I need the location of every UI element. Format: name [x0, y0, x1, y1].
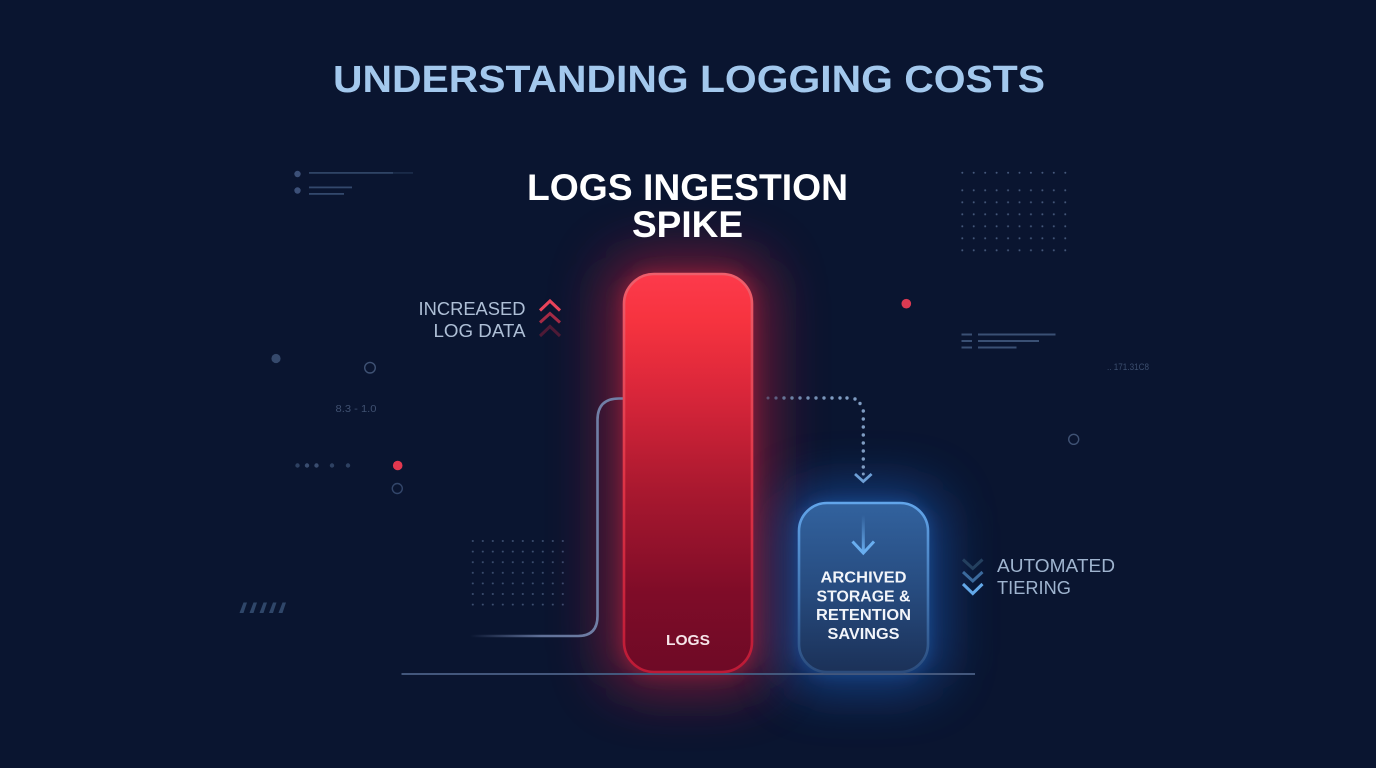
decoration: bottom-left dot grid — [468, 536, 568, 610]
small label: left: 8.3 - 1.0 — [336, 403, 377, 415]
baseline — [402, 673, 975, 675]
callout: automated tiering: TIERING — [997, 577, 1071, 598]
bar glow: red — [606, 256, 770, 690]
decoration: slashes — [240, 602, 286, 613]
bar label: logs: LOGS — [666, 632, 710, 649]
callout: increased log data — [418, 298, 560, 341]
small label: right: .. 171.31C8 — [1107, 362, 1149, 373]
heading: logs ingestion spike: SPIKE — [632, 204, 743, 245]
icon: up chevrons — [540, 301, 560, 336]
heading: logs ingestion spike — [527, 167, 848, 245]
bar label: archived storage and retention savings: ARCHIVED — [820, 570, 906, 586]
icon: down chevrons — [963, 560, 982, 594]
callout: automated tiering — [963, 555, 1115, 598]
bar: logs — [624, 274, 752, 672]
callout: increased log data: LOG DATA — [434, 320, 526, 341]
decoration: dotted row with red dot and ring — [295, 461, 403, 494]
decoration: right ring — [1069, 434, 1079, 444]
bar label: archived storage and retention savings — [816, 570, 911, 643]
title: UNDERSTANDING LOGGING COSTS — [333, 59, 1045, 101]
callout: increased log data: INCREASED — [418, 298, 526, 319]
decoration: left dot and ring — [271, 354, 375, 373]
bar label: archived storage and retention savings: RETENTION — [816, 607, 911, 624]
decoration: top-right dot grid — [957, 172, 1071, 256]
decoration: top-left list lines — [294, 171, 413, 195]
heading: logs ingestion spike: LOGS INGESTION — [527, 167, 848, 208]
bar: archived storage — [799, 503, 928, 672]
connector: curve into logs bar — [470, 398, 625, 636]
decoration: red dot right — [902, 299, 911, 309]
icon: down arrow — [852, 515, 874, 553]
decoration: right list lines — [962, 334, 1056, 348]
arrow: dotted connector — [766, 396, 872, 482]
bar label: archived storage and retention savings: SAVINGS — [828, 626, 900, 643]
callout: automated tiering: AUTOMATED — [997, 555, 1115, 576]
bar glow: blue — [784, 488, 943, 690]
bar label: archived storage and retention savings: STORAGE & — [816, 588, 910, 606]
